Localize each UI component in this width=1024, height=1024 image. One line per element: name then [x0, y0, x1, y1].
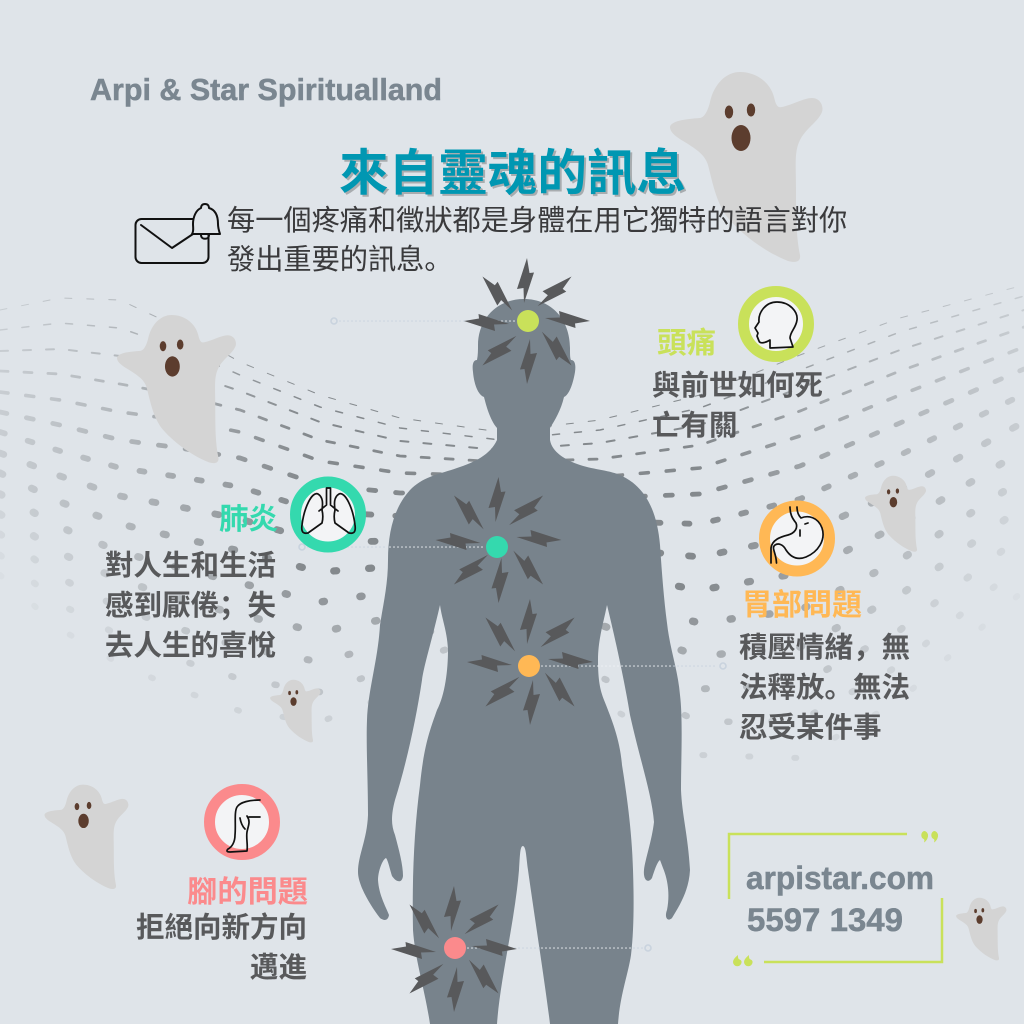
ghost: small bottom right [956, 898, 1006, 960]
panel: pneumonia [105, 482, 360, 664]
text: pneumonia meaning: 對人生和生活 [105, 543, 276, 584]
intro text: 發出重要的訊息。 [227, 237, 453, 278]
text: pneumonia meaning [105, 543, 277, 664]
text: pneumonia meaning: 去人生的喜悅 [105, 623, 276, 664]
leader line: chest [299, 544, 485, 550]
panel: headache [652, 292, 823, 444]
text: headache meaning [652, 363, 823, 444]
heading: leg problems: 腳的問題 [187, 867, 308, 911]
icon: head profile [744, 292, 808, 356]
text: stomach meaning [739, 625, 910, 746]
halftone dot wave background [0, 285, 1024, 758]
leader line: leg [468, 945, 651, 951]
pain burst: head [464, 258, 590, 384]
ghost: small centre left [270, 680, 320, 742]
text: stomach meaning: 積壓情緒，無 [739, 625, 910, 666]
text: leg meaning [136, 905, 307, 986]
text: leg meaning: 邁進 [250, 945, 307, 986]
text: leg meaning: 拒絕向新方向 [136, 905, 307, 946]
text: stomach meaning: 忍受某件事 [739, 705, 882, 746]
human body silhouette [358, 299, 690, 1024]
contact details [746, 860, 934, 938]
pain burst: stomach [467, 599, 593, 725]
ghost: large top right [670, 72, 823, 262]
icon: leg [210, 790, 274, 854]
brand name: Arpi & Star Spiritualland [90, 72, 442, 107]
heading: stomach problems: 胃部問題 [742, 580, 862, 624]
icon: opening quote marks [733, 955, 753, 966]
leader line: stomach [542, 663, 726, 669]
pain burst: leg [391, 886, 517, 1012]
text: stomach meaning: 法釋放。無法 [739, 665, 910, 706]
icon: envelope with bell [136, 204, 220, 263]
text: pneumonia meaning: 感到厭倦；失 [105, 583, 277, 624]
contact details: 5597 1349 [747, 902, 903, 938]
icon: stomach [764, 506, 830, 571]
heading: headache: 頭痛 [657, 320, 716, 362]
intro text: 每一個疼痛和徵狀都是身體在用它獨特的語言對你 [227, 198, 847, 239]
contact details: arpistar.com [746, 860, 934, 896]
panel: stomach problems [739, 506, 910, 746]
heading: pneumonia: 肺炎 [219, 496, 278, 538]
text: headache meaning: 亡有關 [652, 403, 738, 444]
icon: closing quote marks [921, 831, 938, 842]
ghost: small right [865, 476, 926, 552]
pain burst: chest [436, 477, 562, 603]
panel: leg problems [136, 790, 308, 986]
intro text [227, 198, 847, 278]
ghost: lower left [45, 785, 128, 889]
leader line: head [331, 318, 515, 324]
text: headache meaning: 與前世如何死 [652, 363, 823, 404]
icon: lungs [296, 482, 360, 547]
title: 來自靈魂的訊息 [339, 133, 686, 205]
ghost: left [117, 315, 236, 463]
contact frame [729, 831, 942, 962]
